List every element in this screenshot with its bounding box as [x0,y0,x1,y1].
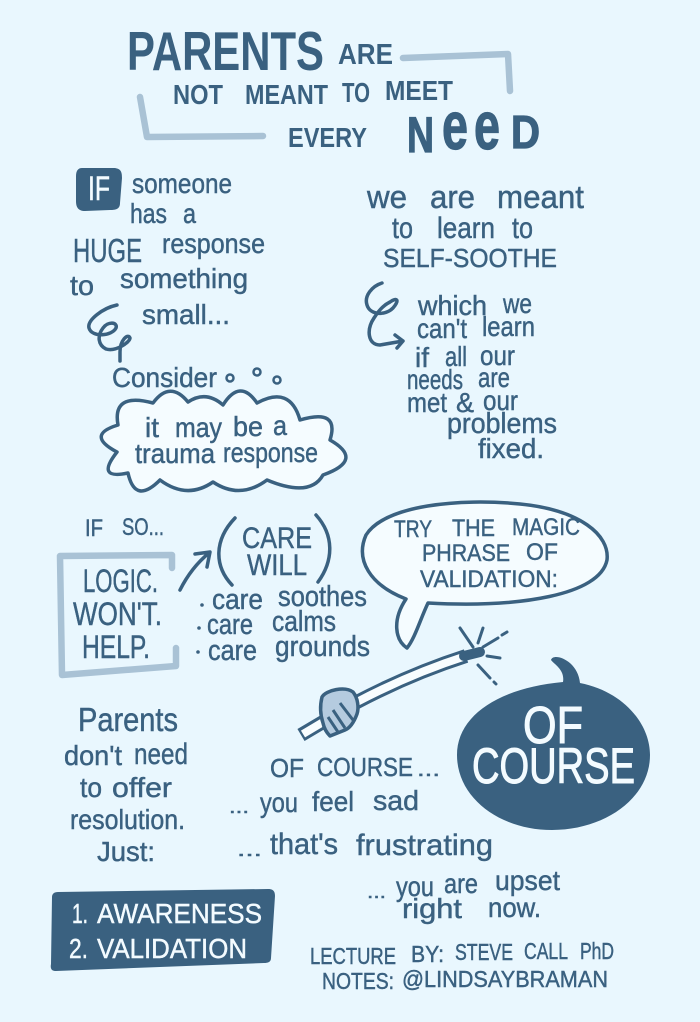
text: validation phrases: are [444,868,478,899]
text: care will in parentheses [219,515,330,585]
icon: magic wand [301,628,507,736]
text: validation phrases: ... [229,797,249,817]
speech bubble: magic phrase [362,502,607,648]
text: validation phrases: frustrating [356,829,493,862]
box: awareness validation: 1. [72,898,88,929]
text: which we can't learn: which [417,290,487,321]
list: care actions: grounds [275,631,370,663]
credits [310,938,614,994]
cloud: trauma response: response [223,437,318,468]
text: which we can't learn: learn [482,311,535,342]
text: validation phrases: feel [312,786,354,817]
text: validation phrases: ... [237,840,262,860]
text: validation phrases: OF [270,753,304,783]
text: which we can't learn: if [415,342,429,373]
text: which we can't learn: & [456,387,474,418]
list: care actions: calms [272,606,336,638]
text: huge response: HUGE [73,232,142,269]
IF badge [76,168,122,211]
box: awareness validation: VALIDATION [97,933,247,964]
icon: curly arrow right [366,283,403,348]
title: MEET [385,75,453,106]
credits: STEVE [455,939,513,965]
text: parents don't need to offer resolution: Parents [78,701,178,738]
cloud: trauma response: a [273,410,287,441]
text: which we can't learn: problems [447,408,557,440]
text: self-soothe: to [512,212,533,245]
text: parents don't need to offer resolution: to [80,772,102,803]
text: huge response: a [183,198,196,229]
text: validation phrases: ... [367,882,386,902]
text: self-soothe: meant [497,179,584,215]
list: care actions [196,581,370,667]
title: NOT [173,79,223,110]
IF badge: IF [88,170,110,208]
text: which we can't learn: all [445,341,467,372]
text: parents don't need to offer resolution: resolution. [70,804,185,835]
text: validation phrases: upset [495,865,560,896]
icon: curly arrow down [89,305,130,361]
text: if so [85,514,164,542]
speech bubble: magic phrase: TRY [394,516,432,543]
text: validation phrases: you [260,787,298,818]
text: which we can't learn: our [480,340,515,371]
box: awareness validation: 2. [69,933,88,964]
arrow: to care will [180,552,210,590]
text: self-soothe: SELF-SOOTHE [383,243,557,273]
text: consider: Consider [112,362,217,393]
text: huge response: to [70,270,94,301]
box: logic won't help: WON'T. [73,596,162,632]
text: validation phrases: now. [488,892,541,923]
text: parents don't need to offer resolution [64,701,188,867]
text: validation phrases: that's [270,828,338,861]
title: TO [342,77,370,108]
text: huge response: something [120,263,248,294]
text: huge response: small... [142,299,230,330]
text: if so: SO... [122,514,164,541]
text: parents don't need to offer resolution: Just: [97,836,155,867]
title: N [407,107,434,163]
list: care actions: care [212,584,263,616]
credits: BY: [411,941,444,967]
text: care will in parentheses: CARE [242,522,312,555]
speech bubble: magic phrase: THE [452,515,495,542]
title: MEANT [245,79,328,110]
text: validation phrases: sad [373,785,419,816]
text: which we can't learn: we [502,288,532,319]
credits: LECTURE [310,943,396,969]
text: which we can't learn: met [407,387,447,418]
text: which we can't learn [407,288,557,464]
text: self-soothe: we [366,179,407,215]
credits: NOTES: [322,968,394,994]
text: which we can't learn: fixed. [478,433,544,464]
title: PARENTS [127,20,324,82]
text: validation phrases [229,752,560,924]
text: if so: IF [85,515,103,542]
title: D [511,106,540,158]
text: huge response: has [130,198,167,229]
title: e [474,88,500,164]
speech bubble: magic phrase: PHRASE [422,540,510,567]
credits: CALL [524,938,568,964]
speech bubble: magic phrase: OF [526,539,558,566]
text: validation phrases: you [396,871,434,902]
title: EVERY [288,122,367,153]
box: logic won't help: LOGIC. [83,563,158,599]
text: parents don't need to offer resolution: need [134,738,188,771]
text: which we can't learn: can't [417,313,467,344]
text: care will in parentheses: WILL [247,549,307,582]
text: self-soothe [366,179,584,273]
list: care actions: care [207,609,253,641]
cloud: trauma response: be [233,411,263,442]
text: which we can't learn: needs [407,364,463,395]
box: awareness validation [51,889,275,971]
text: self-soothe: learn [437,212,495,245]
box: logic won't help [60,555,176,675]
text: validation phrases: right [402,893,462,924]
speech bubble: magic phrase: VALIDATION: [420,566,558,593]
box: awareness validation: AWARENESS [97,898,262,929]
badge: of course: OF [523,697,583,755]
text: consider [112,362,280,393]
cloud: trauma response: trauma [135,438,215,469]
text: validation phrases: ... [417,759,440,781]
text: huge response: someone [132,168,232,199]
list: care actions: soothes [278,581,367,613]
text: validation phrases: COURSE [317,752,413,782]
title bracket [140,54,510,137]
text: parents don't need to offer resolution: don't [64,740,122,771]
text: parents don't need to offer resolution: offer [112,772,172,803]
badge: of course: COURSE [472,738,635,794]
text: self-soothe: to [392,212,413,245]
text: which we can't learn: our [483,385,518,416]
cloud: trauma response [101,391,346,491]
cloud: trauma response: it [145,412,159,443]
title [127,20,540,164]
list: care actions: care [208,635,257,667]
box: logic won't help: HELP. [82,629,150,665]
text: self-soothe: are [430,179,475,215]
text: huge response: response [162,228,265,259]
cloud: trauma response: may [175,412,222,443]
badge: of course [457,657,650,830]
text: which we can't learn: are [478,362,510,393]
text: huge response [70,168,265,330]
speech bubble: magic phrase: MAGIC [512,514,580,541]
title: e [442,88,468,164]
credits: PhD [580,938,614,964]
credits: @LINDSAYBRAMAN [402,966,608,992]
title: ARE [338,39,393,71]
